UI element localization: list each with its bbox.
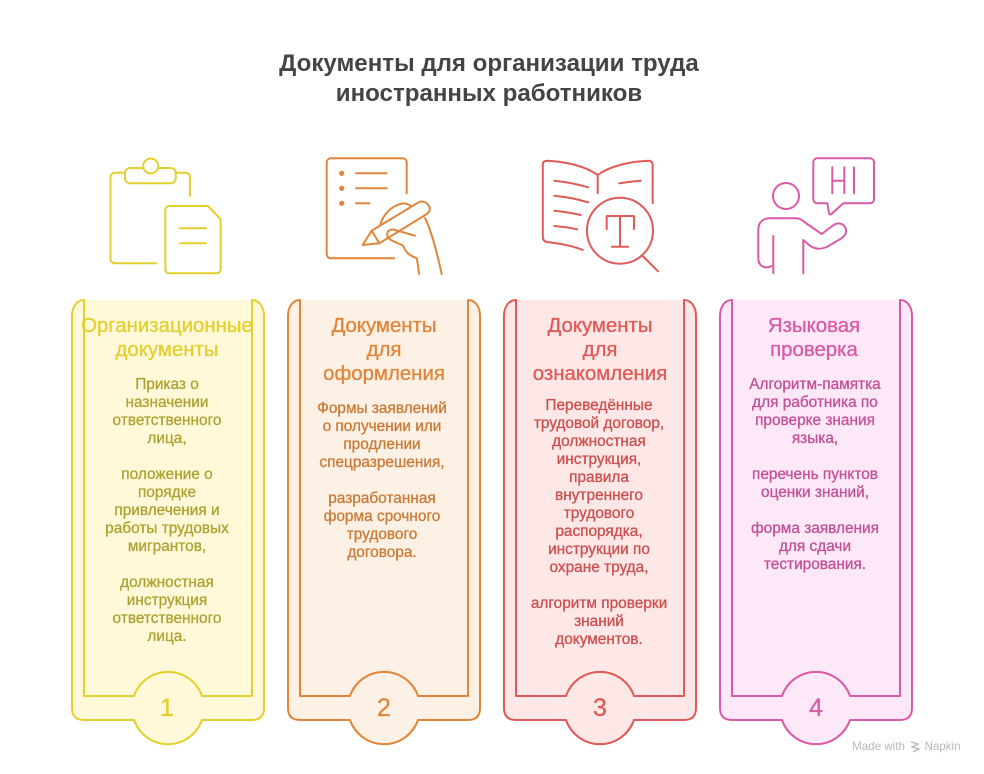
icon: book with magnifier — [543, 161, 658, 271]
text block: знаний — [574, 613, 624, 630]
text block: лица, — [147, 430, 187, 447]
text block: спецразрешения, — [319, 454, 445, 471]
text block: положение о — [121, 466, 213, 483]
text block: инструкция, — [557, 451, 641, 468]
text block: должностная — [552, 433, 646, 450]
panel frame — [720, 300, 912, 744]
icon: clipboard and document — [110, 158, 221, 273]
text block: перечень пунктов — [752, 466, 878, 483]
panel background — [504, 300, 696, 744]
number 3: 3 — [593, 694, 607, 722]
text block: охране труда, — [550, 559, 648, 576]
panel frame — [72, 300, 264, 744]
heading — [533, 315, 667, 385]
text block: мигрантов, — [128, 538, 206, 555]
text block: привлечения и — [114, 502, 220, 519]
text block: работы трудовых — [105, 520, 229, 537]
panel background — [72, 300, 264, 744]
text block: Приказ о — [135, 376, 199, 393]
text block: инструкции по — [548, 541, 650, 558]
text block — [531, 397, 667, 648]
text block: форма срочного — [324, 508, 440, 525]
text block: о получении или — [323, 418, 441, 435]
title: Документы для организации труда — [279, 50, 699, 77]
panel: organizational documents — [72, 300, 264, 744]
text block: проверке знания — [755, 412, 875, 429]
text block — [105, 376, 229, 645]
text block: договора. — [347, 544, 417, 561]
text block: ответственного — [113, 610, 221, 627]
panel: documents for processing — [288, 300, 480, 744]
heading: Языковая — [768, 315, 860, 337]
text block: трудового — [564, 505, 634, 522]
heading: проверка — [770, 339, 859, 361]
text block: разработанная — [328, 490, 436, 507]
text block — [749, 376, 881, 573]
panel frame — [504, 300, 696, 744]
heading: оформления — [323, 363, 445, 385]
text block: оценки знаний, — [761, 484, 869, 501]
text block: инструкция — [127, 592, 207, 609]
text block: порядке — [138, 484, 196, 501]
text block: продлении — [343, 436, 421, 453]
number 1: 1 — [160, 694, 174, 722]
text block: ответственного — [113, 412, 221, 429]
text block: для сдачи — [779, 538, 851, 555]
heading: для — [367, 339, 401, 361]
text block: распорядка, — [555, 523, 643, 540]
text block: внутреннего — [555, 487, 643, 504]
text block: правила — [569, 469, 629, 486]
heading — [323, 315, 445, 385]
heading: для — [583, 339, 617, 361]
text block: Переведённые — [545, 397, 653, 414]
text block: трудового — [347, 526, 417, 543]
panel background — [720, 300, 912, 744]
text block: должностная — [120, 574, 214, 591]
heading: документы — [116, 339, 218, 361]
text block: языка, — [792, 430, 838, 447]
watermark: made with Napkin: Made with — [852, 740, 905, 753]
panel: documents for familiarization — [504, 300, 696, 744]
panel: language check — [720, 300, 912, 744]
heading — [768, 315, 860, 361]
text block: тестирования. — [764, 556, 866, 573]
title — [279, 50, 699, 107]
heading: Документы — [547, 315, 653, 337]
text block — [317, 400, 447, 561]
heading — [81, 315, 253, 361]
number 2: 2 — [377, 694, 391, 722]
text block: лица. — [147, 628, 187, 645]
heading: ознакомления — [533, 363, 667, 385]
text block: назначении — [126, 394, 208, 411]
text block: Формы заявлений — [317, 400, 447, 417]
watermark: made with Napkin: Napkin — [924, 740, 961, 753]
text block: документов. — [555, 631, 643, 648]
text block: форма заявления — [751, 520, 879, 537]
text block: трудовой договор, — [534, 415, 664, 432]
text block: алгоритм проверки — [531, 595, 667, 612]
text block: для работника по — [752, 394, 878, 411]
icon: hand writing on list — [327, 158, 442, 274]
icon: person saying HI — [758, 158, 874, 273]
heading: Организационные — [81, 315, 253, 337]
title: иностранных работников — [336, 80, 642, 107]
number 4: 4 — [809, 694, 823, 722]
watermark: made with Napkin — [852, 740, 961, 753]
text block: Алгоритм-памятка — [749, 376, 881, 393]
heading: Документы — [331, 315, 437, 337]
panel background — [288, 300, 480, 744]
panel frame — [288, 300, 480, 744]
